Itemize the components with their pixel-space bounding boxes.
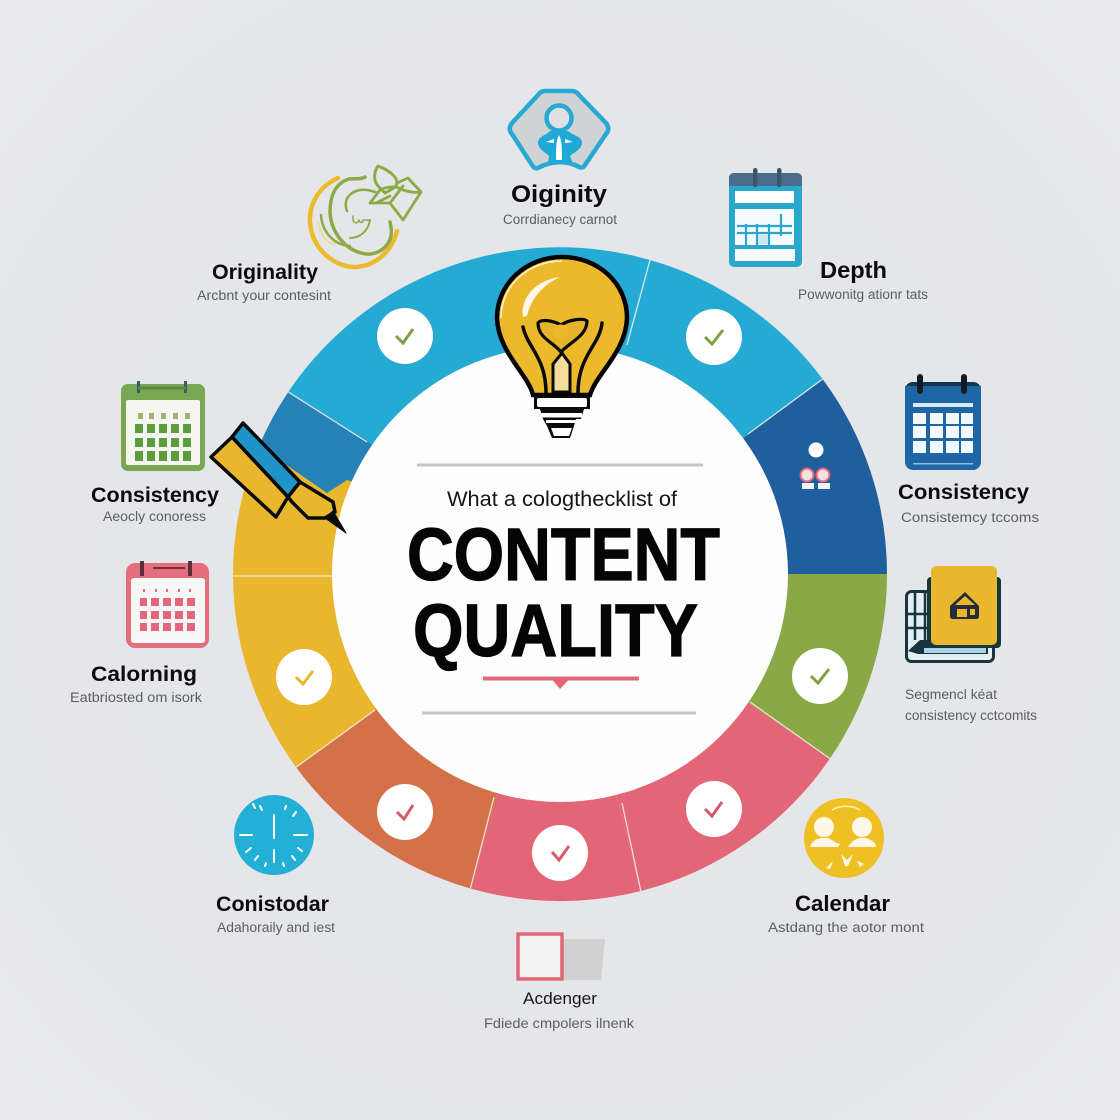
label: Calorning [91, 663, 197, 686]
description: Aeocly conoress [103, 509, 206, 524]
description: Astdang the aotor mont [768, 920, 924, 935]
icon: cyan calendar [729, 168, 802, 267]
ring chart: checklist segments [233, 247, 887, 901]
title line: quality: QUALITY [413, 589, 698, 672]
segment: dark blue [560, 379, 887, 574]
divider: top [417, 464, 703, 466]
description: Eatbriosted om isork [70, 690, 202, 705]
icon: green calendar [121, 381, 205, 471]
label: Conistodar [216, 893, 329, 916]
description [905, 687, 1037, 723]
check badge: orange [377, 784, 433, 840]
description: Arcbnt your contesint [197, 288, 331, 303]
icon: dark blue segment marker [800, 442, 830, 489]
check badge: green [792, 648, 848, 704]
description: Corrdianecy carnot [503, 212, 617, 227]
subheading: What a cologthecklist of [447, 488, 677, 511]
check badge: top cyan [377, 308, 433, 364]
segment: upper left yellow [233, 440, 560, 576]
label: Oiginity [511, 181, 608, 208]
center white circle [332, 346, 788, 802]
check badge: upper right cyan [686, 309, 742, 365]
title line: content: CONTENT [407, 513, 720, 596]
icon: leaf swirl [310, 166, 421, 267]
item: lower left conistodar [216, 795, 335, 935]
label: Depth [820, 257, 887, 283]
icon: yellow book with house [906, 566, 1001, 662]
icon: pencil [211, 423, 346, 533]
description: consistency cctcomits [905, 708, 1037, 723]
divider: bottom [422, 712, 696, 714]
segment: orange [296, 574, 560, 888]
icon: person hexagon [510, 91, 608, 168]
item: bottom acdenger [484, 934, 634, 1031]
icon: clock [234, 795, 314, 875]
item: lower right calendar [768, 798, 924, 935]
item: right book [905, 566, 1037, 723]
icon: blue calendar [905, 374, 981, 470]
description: Adahoraily and iest [217, 920, 335, 935]
description: Fdiede cmpolers ilnenk [484, 1016, 634, 1031]
label: Consistency [898, 481, 1029, 504]
item: upper left originality [197, 166, 421, 303]
segment: green [560, 574, 887, 759]
central heading block [407, 464, 720, 714]
item: left calorning [70, 561, 209, 705]
segment: medium blue [259, 392, 400, 493]
label: Originality [212, 261, 318, 284]
label: Consistency [91, 484, 219, 507]
check badge: lower left yellow [276, 649, 332, 705]
label: Acdenger [523, 989, 597, 1008]
check badge: lower right pink [686, 781, 742, 837]
segment: lower right pink [560, 574, 830, 891]
description: Consistemcy tccoms [901, 510, 1039, 525]
segment: lower left yellow [233, 574, 560, 767]
check badge: bottom pink [532, 825, 588, 881]
description: Powwonitg ationr tats [798, 287, 928, 302]
segment: upper right cyan [560, 260, 823, 574]
accent marker [483, 676, 639, 689]
segment: top cyan [288, 247, 650, 574]
item: left consistency [91, 381, 219, 524]
item: upper right depth [729, 168, 928, 302]
icon: framed square [518, 934, 605, 980]
icon: light bulb [497, 257, 627, 438]
description: Segmencl kéat [905, 687, 997, 702]
icon: pink calendar [126, 561, 209, 648]
icon: two people [804, 798, 884, 878]
item: top hexagon [503, 91, 617, 227]
item: right consistency [898, 374, 1039, 525]
segment: bottom pink [470, 574, 641, 901]
label: Calendar [795, 891, 890, 916]
